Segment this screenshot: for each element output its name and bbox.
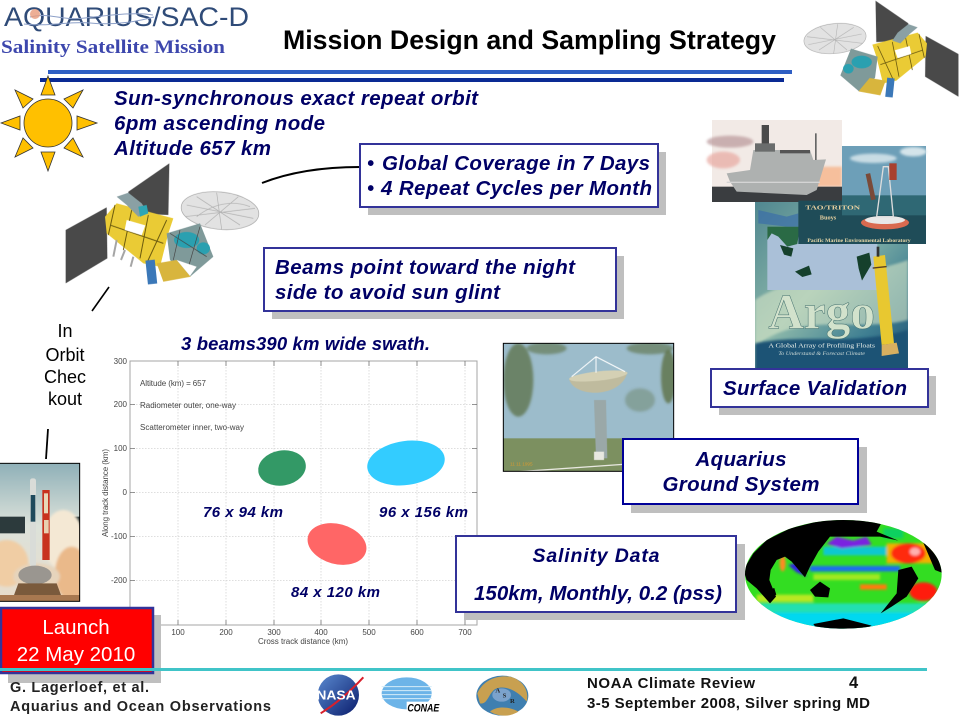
photo: TAO/TRITON buoy: TAO/TRITON [805, 205, 860, 212]
connector: satellite to coverage box [262, 167, 360, 183]
footer: author: G. Lagerloef, et al. [10, 680, 149, 696]
chart: beam footprints [101, 357, 477, 646]
photos: surface validation collage [707, 120, 927, 372]
callout: Salinity Data [456, 536, 745, 620]
chart: beam footprints: 300 [114, 357, 128, 366]
callout: coverage: • [367, 153, 374, 175]
callout: launch date: 22 May 2010 [17, 643, 135, 666]
header rules [40, 70, 792, 82]
footer: author: Aquarius and Ocean Observations [10, 699, 271, 715]
callout: beams [264, 248, 624, 319]
photo: rocket launch [0, 463, 88, 601]
logo: NASA: NASA [316, 688, 356, 702]
photo: ground station antenna [503, 342, 676, 473]
beam size labels: 96 x 156 km [379, 504, 468, 521]
chart: beam footprints: Scatterometer inner, two-way [140, 423, 244, 432]
chart: beam footprints: 700 [458, 628, 472, 637]
beam: green [255, 447, 309, 489]
footer rule [0, 668, 927, 671]
photo: Argo poster: A Global Array of Profiling Floats [768, 342, 876, 349]
logo: ASR globe: R [510, 698, 515, 705]
footer: author [10, 680, 271, 715]
map: global salinity [743, 518, 943, 633]
chart: beam footprints: 300 [267, 628, 281, 637]
callout: coverage: 4 Repeat Cycles per Month [380, 177, 652, 200]
callout: Surface Validation [711, 369, 936, 415]
footer: event: 3-5 September 2008, Silver spring MD [587, 695, 870, 712]
icon: sun [1, 76, 97, 171]
chart: beam footprints: 100 [114, 444, 128, 453]
callout: coverage: Global Coverage in 7 Days [382, 152, 650, 175]
callout: beams: Beams point toward the night [275, 256, 576, 279]
chart: beam footprints: 200 [114, 400, 128, 409]
chart: beam footprints: -200 [111, 576, 128, 585]
chart: beam footprints: 600 [410, 628, 424, 637]
connector: satellite to in-orbit checkout [92, 287, 109, 311]
orbit description text [113, 87, 479, 160]
satellite illustration, top right [802, 1, 958, 98]
photo: research ship [707, 120, 842, 202]
chart: beam footprints: 200 [219, 628, 233, 637]
chart: beam footprints: 400 [314, 628, 328, 637]
beam: red [303, 517, 371, 571]
footer: event: NOAA Climate Review [587, 675, 755, 692]
logo: Aquarius/SAC-D: AQUARIUS/SAC-D [4, 2, 249, 32]
page number: 4 [849, 674, 859, 692]
callout: coverage: • [367, 178, 374, 200]
callout: launch date: Launch [42, 616, 110, 639]
satellite illustration [66, 163, 261, 284]
chart: beam footprints: Radiometer outer, one-way [140, 401, 236, 410]
orbit description text: Altitude 657 km [113, 137, 271, 160]
photo: Argo poster: To Understand & Forecast Climate [778, 352, 865, 357]
logo: CONAE [382, 677, 440, 715]
logo: NASA [316, 674, 363, 716]
beam: blue [364, 436, 448, 490]
label: In Orbit Checkout: In [57, 321, 73, 341]
callout: Aquarius Ground System: Aquarius [694, 448, 786, 471]
chart: beam footprints: 0 [123, 488, 128, 497]
title: Mission Design and Sampling Strategy [283, 25, 776, 55]
orbit description text: Sun-synchronous exact repeat orbit [114, 87, 479, 110]
subtitle: Salinity Satellite Mission: Salinity Satellite Mission [1, 37, 225, 58]
photo: Argo poster [755, 200, 908, 372]
beam size labels: 84 x 120 km [291, 584, 380, 601]
orbit description text: 6pm ascending node [114, 112, 325, 135]
connector: checkout to launch [46, 429, 48, 459]
callout: coverage [360, 144, 666, 215]
label: In Orbit Checkout: Orbit [45, 345, 85, 365]
footer: event [587, 675, 870, 712]
callout: Aquarius Ground System [623, 439, 867, 513]
logo: ASR globe: S [503, 693, 507, 700]
photo: TAO/TRITON buoy: Pacific Marine Environmental Laboratory [807, 239, 911, 244]
chart: beam footprints: Cross track distance (km) [258, 637, 348, 646]
photo: Argo poster: Argo [768, 283, 875, 339]
callout: Aquarius Ground System: Ground System [662, 473, 820, 496]
photo: TAO/TRITON buoy: Buoys [820, 214, 837, 221]
callout: Surface Validation: Surface Validation [723, 377, 907, 400]
chart: beam footprints: Altitude (km) = 657 [140, 379, 207, 388]
chart heading: 3 beams390 km wide swath. [181, 333, 430, 354]
chart: beam footprints: 500 [362, 628, 376, 637]
chart: beam footprints: Along track distance (km) [101, 449, 110, 537]
chart: beam footprints: -100 [111, 532, 128, 541]
chart: beam footprints: 100 [171, 628, 185, 637]
label: In Orbit Checkout [44, 321, 86, 409]
beam size labels [203, 504, 468, 601]
callout: launch date [1, 608, 161, 683]
logo: ASR globe [476, 676, 528, 716]
beam size labels: 76 x 94 km [203, 504, 283, 521]
callout: Salinity Data: Salinity Data [532, 545, 660, 567]
logo: CONAE: CONAE [407, 703, 440, 715]
photo: ground station antenna: 11 11 1995 [510, 461, 533, 466]
label: In Orbit Checkout: Chec [44, 367, 86, 387]
logo: ASR globe: A [495, 687, 500, 694]
callout: Salinity Data: 150km, Monthly, 0.2 (pss) [474, 582, 722, 605]
photo: TAO/TRITON buoy [798, 146, 927, 244]
label: In Orbit Checkout: kout [48, 389, 82, 409]
callout: beams: side to avoid sun glint [275, 281, 501, 304]
